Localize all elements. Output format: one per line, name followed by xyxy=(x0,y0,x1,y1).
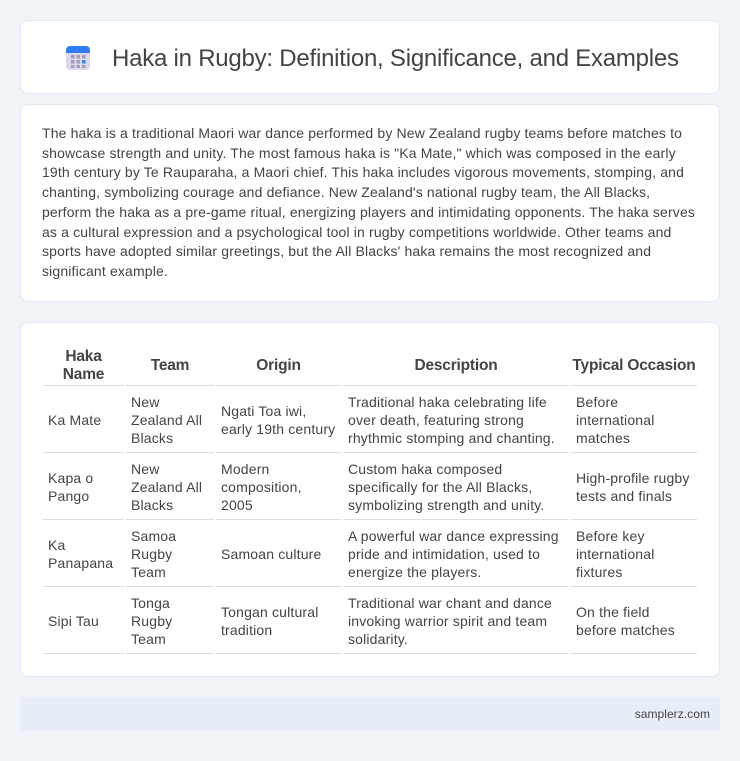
table: haka comparison: Description xyxy=(414,357,498,374)
text block: introduction: as a cultural expression and a psychological tool in rugby competitions worldwide. Other teams and xyxy=(42,224,671,240)
header card xyxy=(20,20,720,94)
table: haka comparison: Pango xyxy=(48,488,89,504)
table: haka comparison: 2005 xyxy=(221,497,253,513)
table: haka comparison: Blacks xyxy=(131,430,173,446)
table: haka comparison: Before key xyxy=(576,528,645,544)
table: haka comparison: composition, xyxy=(221,479,302,495)
table: haka comparison: High-profile rugby xyxy=(576,470,690,486)
table: haka comparison: Tongan cultural xyxy=(221,604,319,620)
table: haka comparison: Traditional haka celebrating life xyxy=(348,394,547,410)
table: haka comparison: Blacks xyxy=(131,497,173,513)
footer bar xyxy=(20,697,720,731)
table: haka comparison: Haka xyxy=(65,348,102,365)
table: haka comparison: Panapana xyxy=(48,555,113,571)
table: haka comparison: Ngati Toa iwi, xyxy=(221,403,306,419)
table: haka comparison: Samoan culture xyxy=(221,546,321,562)
text block: introduction: showcase strength and unity. The most famous haka is "Ka Mate," which was composed in the early xyxy=(42,145,676,161)
table: haka comparison: early 19th century xyxy=(221,421,335,437)
table: haka comparison: Sipi Tau xyxy=(48,613,99,629)
table: haka comparison: Traditional war chant and dance xyxy=(348,595,552,611)
table: haka comparison: pride and intimidation, used to xyxy=(348,546,540,562)
table: haka comparison: rhythmic stomping and chanting. xyxy=(348,430,555,446)
text block: introduction: significant example. xyxy=(42,263,168,279)
table: haka comparison: On the field xyxy=(576,604,650,620)
title: Haka in Rugby: Definition, Significance, and Examples xyxy=(112,45,679,72)
text block: introduction xyxy=(42,125,695,279)
table: haka comparison: international xyxy=(576,412,654,428)
table: haka comparison: Before xyxy=(576,394,618,410)
table: haka comparison: tradition xyxy=(221,622,272,638)
table: haka comparison: invoking warrior spirit and team xyxy=(348,613,547,629)
table: haka comparison: specifically for the All Blacks, xyxy=(348,479,532,495)
table: haka comparison: symbolizing strength and unity. xyxy=(348,497,544,513)
table: haka comparison: Zealand All xyxy=(131,412,202,428)
table: haka comparison: international xyxy=(576,546,654,562)
table: haka comparison xyxy=(43,348,697,654)
table: haka comparison: Ka Mate xyxy=(48,412,101,428)
table: haka comparison: before matches xyxy=(576,622,675,638)
table: haka comparison: matches xyxy=(576,430,630,446)
table: haka comparison: Tonga xyxy=(131,595,170,611)
table: haka comparison: Ka xyxy=(48,537,65,553)
table: haka comparison: over death, featuring strong xyxy=(348,412,524,428)
table: haka comparison: Team xyxy=(151,357,189,374)
table: haka comparison: Origin xyxy=(256,357,301,374)
table: haka comparison: Team xyxy=(131,564,166,580)
table: haka comparison: Zealand All xyxy=(131,479,202,495)
table: haka comparison: Rugby xyxy=(131,613,172,629)
text block: introduction: perform the haka as a pre-game ritual, energizing players and intimidating opponents. The haka serves xyxy=(42,204,695,220)
table: haka comparison: A powerful war dance expressing xyxy=(348,528,559,544)
text block: introduction: sports have adopted similar greetings, but the All Blacks' haka remains the most recognized and xyxy=(42,243,651,259)
table: haka comparison: Custom haka composed xyxy=(348,461,502,477)
table: haka comparison: New xyxy=(131,461,160,477)
icon: calendar xyxy=(66,46,90,70)
table: haka comparison: Name xyxy=(63,366,104,383)
table: haka comparison: fixtures xyxy=(576,564,622,580)
text block: introduction: chanting, symbolizing courage and defiance. New Zealand's national rugby team, the All Blacks, xyxy=(42,184,650,200)
table: haka comparison: solidarity. xyxy=(348,631,408,647)
table: haka comparison: Modern xyxy=(221,461,270,477)
table: haka comparison: Kapa o xyxy=(48,470,93,486)
panel: introduction paragraph xyxy=(20,104,720,302)
table: haka comparison: energize the players. xyxy=(348,564,482,580)
table: haka comparison: New xyxy=(131,394,160,410)
table: haka comparison: Rugby xyxy=(131,546,172,562)
panel: haka table xyxy=(20,322,720,677)
footer source text: samplerz.com xyxy=(635,707,710,721)
table: haka comparison: Team xyxy=(131,631,166,647)
text block: introduction: The haka is a traditional Maori war dance performed by New Zealand rugby teams before matches to xyxy=(42,125,682,141)
table: haka comparison: Samoa xyxy=(131,528,176,544)
table: haka comparison: tests and finals xyxy=(576,488,672,504)
text block: introduction: 19th century by Te Rauparaha, a Maori chief. This haka includes vigorous movements, stomping, and xyxy=(42,164,684,180)
table: haka comparison: Typical Occasion xyxy=(572,357,696,374)
